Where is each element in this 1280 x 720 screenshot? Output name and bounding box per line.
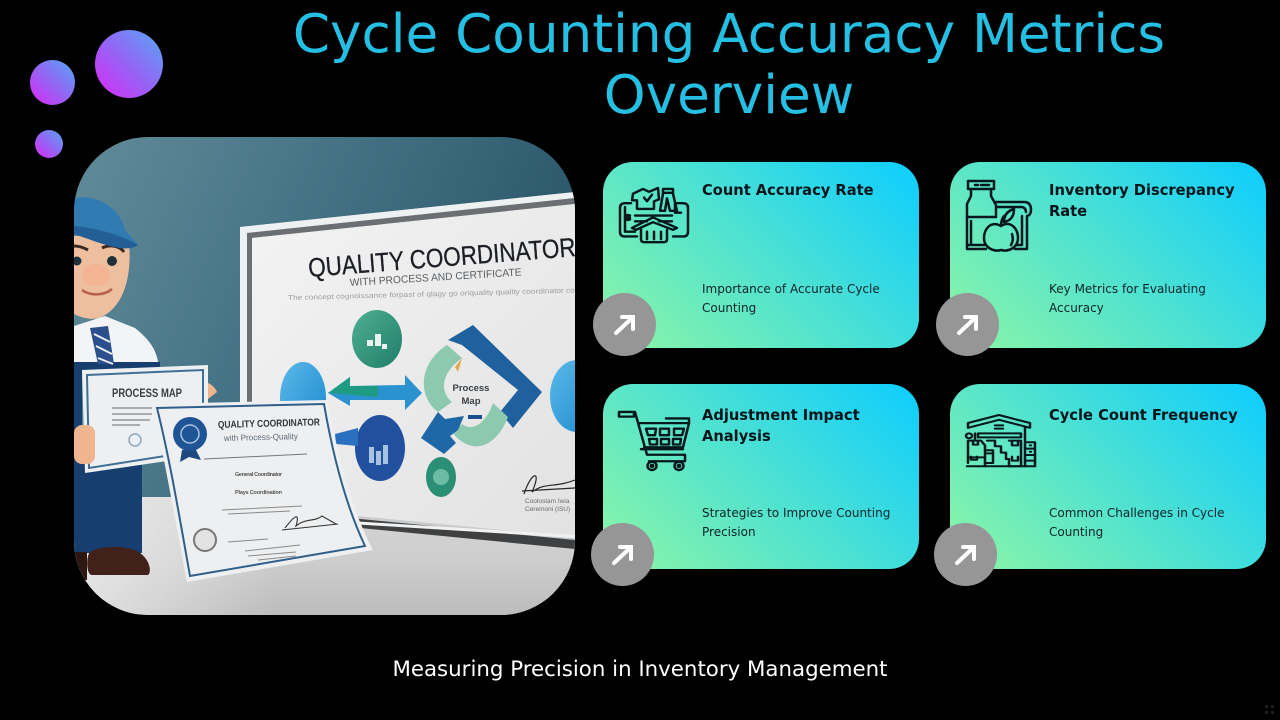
face [74,236,130,319]
wall background [74,137,575,537]
certificate body text line two: Plays Coordination [235,490,283,496]
card: inventory discrepancy rate [950,162,1266,348]
heading: Cycle Count Frequency [1049,407,1238,424]
heading: Inventory Discrepancy Rate [1049,182,1235,220]
corner mark [1265,705,1274,714]
card: cycle count frequency [950,384,1266,569]
arrow button: inventory discrepancy rate [936,293,999,356]
title [293,3,1165,126]
icon: shopping cart [618,410,690,472]
certificate heading: QUALITY COORDINATOR [218,417,321,431]
ribbon seal [173,417,207,462]
description: Common Challenges in Cycle Counting [1049,506,1224,539]
certificate body text: General Coordinator [235,472,283,478]
shoe [87,547,150,575]
heading: Count Accuracy Rate [702,182,874,199]
board subheading: WITH PROCESS AND CERTIFICATE [349,267,522,289]
board description: The concept cognoissance forpast of qlagy go oriquality quality coordinator co [288,287,575,302]
board signature [522,476,575,494]
decorative circle: small [35,130,63,158]
title: Cycle Counting Accuracy Metrics [293,3,1165,65]
description: Importance of Accurate Cycle Counting [702,282,880,314]
card: adjustment impact analysis [603,384,919,569]
certificate stamp [194,529,216,551]
tie [90,326,114,364]
quality coordinator certificate [152,400,373,582]
certificate signature [282,516,338,530]
process map label: Process [453,383,489,394]
heading: Adjustment Impact Analysis [702,407,860,445]
certificate subheading: with Process-Quality [223,431,299,443]
caption: Measuring Precision in Inventory Management [392,657,888,682]
board signature caption: Coolostam Iwia [525,498,570,505]
icon: bottle, bread and apple [966,180,1032,252]
title: Overview [604,64,854,126]
hard hat [74,197,138,248]
card: count accuracy rate [603,162,919,348]
hand right [208,382,217,399]
floor [74,497,575,615]
board signature caption line two: Ceremoni (ISU) [525,506,570,513]
icon: online store with products [618,186,690,244]
arrow button: count accuracy rate [593,293,656,356]
illustration: quality coordinator with certificates [74,137,575,615]
icon: warehouse [964,414,1036,468]
decorative circle: large [95,30,163,98]
process map certificate: PROCESS MAP [112,388,182,400]
description: Strategies to Improve Counting Precision [702,506,890,539]
process map certificate [82,365,208,473]
decorative circle: medium [30,60,75,105]
arrow button: cycle count frequency [934,523,997,586]
person [72,197,217,580]
shirt [74,316,158,362]
description: Key Metrics for Evaluating Accuracy [1049,282,1206,314]
process diagram: Map [462,396,481,407]
framed board [240,192,604,549]
process diagram [280,310,604,497]
hand left [74,425,95,464]
arrow button: adjustment impact analysis [591,523,654,586]
board heading: QUALITY COORDINATOR [307,232,577,283]
trousers [74,362,160,553]
